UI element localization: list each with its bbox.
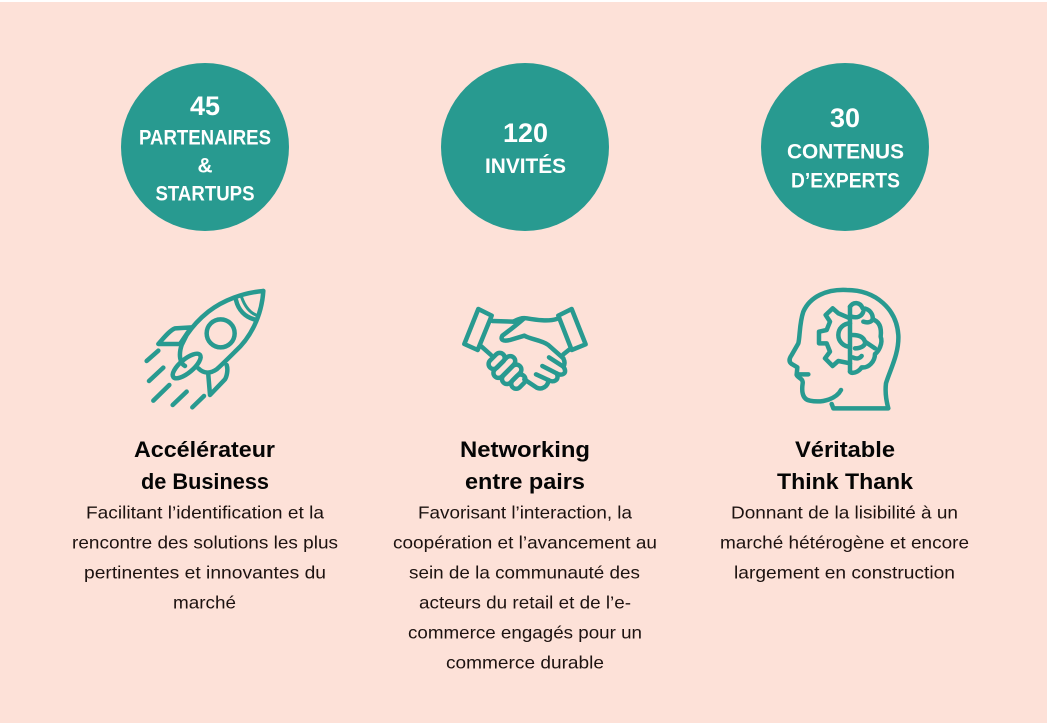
icon: handshake bbox=[464, 309, 586, 391]
text block: véritable description: marché hétérogène et encore bbox=[720, 532, 969, 552]
heading: accélérateur de business: de Business bbox=[141, 469, 269, 494]
stat circle: 45 partenaires et startups bbox=[121, 63, 289, 231]
stat circle: 30 contenus d'experts: D’EXPERTS bbox=[791, 170, 900, 192]
heading: accélérateur de business: Accélérateur bbox=[134, 437, 275, 462]
heading: accélérateur de business bbox=[134, 437, 275, 494]
text block: networking description: Favorisant l’interaction, la bbox=[418, 502, 632, 522]
text block: véritable description: largement en construction bbox=[734, 562, 955, 582]
text block: véritable description bbox=[720, 502, 969, 582]
heading: véritable think thank: Véritable bbox=[795, 437, 895, 462]
heading: véritable think thank bbox=[777, 437, 913, 494]
text block: accélérateur description bbox=[72, 502, 338, 612]
text block: véritable description: Donnant de la lisibilité à un bbox=[731, 502, 958, 522]
text block: accélérateur description: rencontre des solutions les plus bbox=[72, 532, 338, 552]
stat circle: 30 contenus d'experts: CONTENUS bbox=[787, 140, 904, 164]
icon: head with gear and brain bbox=[790, 290, 898, 408]
stat circle: 30 contenus d'experts bbox=[761, 63, 929, 231]
stat circle: 30 contenus d'experts: 30 bbox=[830, 103, 860, 133]
panel: véritable think thank bbox=[720, 63, 969, 582]
stat circle: 45 partenaires et startups: PARTENAIRES bbox=[139, 126, 271, 150]
text block: accélérateur description: Facilitant l’identification et la bbox=[86, 502, 324, 522]
text block: networking description: sein de la communauté des bbox=[409, 562, 640, 582]
heading: networking entre pairs: Networking bbox=[460, 437, 590, 462]
panel: accélérateur de business bbox=[72, 63, 338, 612]
stat circle: 45 partenaires et startups: STARTUPS bbox=[156, 182, 254, 206]
text block: accélérateur description: pertinentes et innovantes du bbox=[84, 562, 326, 582]
stat circle: 120 invités: 120 bbox=[503, 118, 548, 148]
heading: véritable think thank: Think Thank bbox=[777, 469, 913, 494]
heading: networking entre pairs: entre pairs bbox=[465, 469, 585, 494]
text block: networking description: commerce engagés pour un bbox=[408, 622, 642, 642]
text block: networking description: acteurs du retail et de l’e- bbox=[419, 592, 631, 612]
text block: networking description: coopération et l’avancement au bbox=[393, 532, 657, 552]
stat circle: 120 invités bbox=[441, 63, 609, 231]
icon: rocket bbox=[147, 291, 263, 407]
text block: accélérateur description: marché bbox=[173, 592, 236, 612]
stat circle: 45 partenaires et startups: & bbox=[198, 154, 212, 178]
heading: networking entre pairs bbox=[460, 437, 590, 494]
stat circle: 120 invités: INVITÉS bbox=[485, 155, 566, 178]
panel: networking entre pairs bbox=[393, 63, 657, 672]
text block: networking description bbox=[393, 502, 657, 672]
text block: networking description: commerce durable bbox=[446, 652, 604, 672]
stat circle: 45 partenaires et startups: 45 bbox=[190, 91, 220, 121]
